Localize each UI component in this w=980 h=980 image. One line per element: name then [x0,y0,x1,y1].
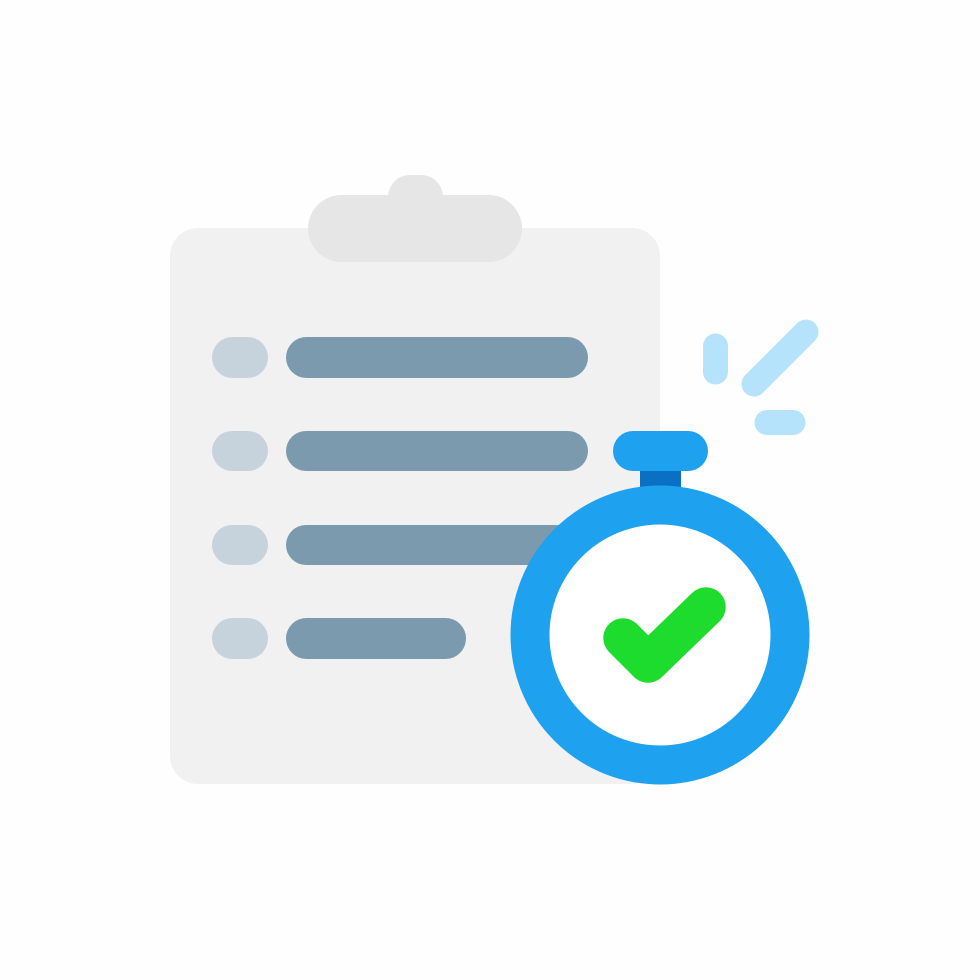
stopwatch crown [613,431,708,471]
icon: sparkle lines [716,332,806,422]
checklist row 1 [212,337,588,378]
checklist row 3 [212,525,588,565]
checklist row 4 [212,618,466,659]
stopwatch ring and face [530,505,790,765]
panel: clipboard board [170,228,660,784]
icon: clipboard clip [308,175,522,262]
checklist row 2 [212,431,588,471]
icon: stopwatch [530,431,790,765]
stopwatch neck [640,462,681,498]
icon: green check mark [623,607,706,663]
